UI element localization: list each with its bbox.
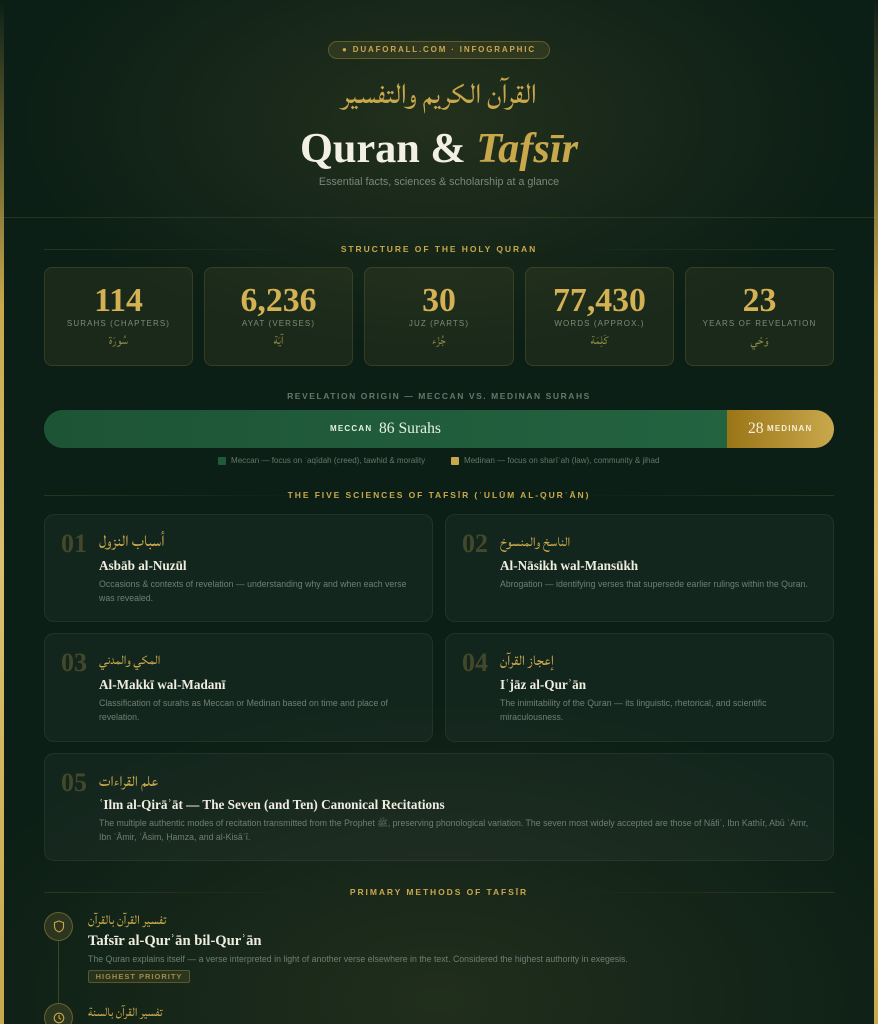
card 04: إعجاز القرآن <box>500 649 554 675</box>
medinan segment: MEDINAN <box>767 424 812 433</box>
card 01: أسباب النزول <box>99 528 165 557</box>
card 05: The multiple authentic modes of recitation transmitted from the Prophet ﷺ, preserving phonological variation. The seven most widely accepted are those of Nāfiʿ, Ibn Kathīr, Abū ʿAmr, <box>99 818 808 828</box>
stat: surahs: 114 <box>94 282 143 319</box>
stat: years: YEARS OF REVELATION <box>703 319 816 328</box>
stat: words: 77,430 <box>553 282 646 319</box>
method 1 text: The Quran explains itself — a verse interpreted in light of another verse elsewhere in the text. Considered the highest authority in exegesis. <box>88 954 628 964</box>
priority tag: HIGHEST PRIORITY <box>96 972 182 981</box>
stat: juz: جُزْء <box>432 330 446 352</box>
meccan segment: 86 Surahs <box>379 420 441 437</box>
icon: shield <box>44 912 73 941</box>
medinan segment: 28 <box>748 420 764 437</box>
badge <box>328 41 550 59</box>
card 05: ʿIlm al-Qirāʾāt — The Seven (and Ten) Canonical Recitations <box>99 797 445 812</box>
stat: ayat <box>204 267 353 366</box>
card 01: Occasions & contexts of revelation — understanding why and when each verse <box>99 578 406 588</box>
card 05 <box>44 753 834 861</box>
method 1 arabic: تفسير القرآن بالقرآن <box>88 909 166 933</box>
stat: juz <box>364 267 514 366</box>
header <box>0 0 878 218</box>
section heading: methods: PRIMARY METHODS OF TAFSĪR <box>350 887 528 897</box>
meccan segment <box>44 410 727 448</box>
card 03: Classification of surahs as Meccan or Medinan based on time and place of <box>99 698 388 708</box>
stat: ayat: AYAT (VERSES) <box>242 319 315 328</box>
stat: years: وَحْي <box>750 330 769 352</box>
card 01 <box>44 514 433 622</box>
card 03: المكي والمدني <box>99 650 160 673</box>
stat: years: 23 <box>743 282 776 319</box>
card 04: 04 <box>462 648 488 677</box>
card 05: 05 <box>61 768 87 797</box>
card 04: miraculousness. <box>500 712 563 722</box>
card 02: 02 <box>462 529 488 558</box>
priority tag <box>88 970 190 983</box>
stat: juz: JUZ (PARTS) <box>409 319 469 328</box>
card 01: Asbāb al-Nuzūl <box>99 558 187 573</box>
card 03: 03 <box>61 648 87 677</box>
revelation bar <box>44 410 834 448</box>
medinan segment <box>727 410 834 448</box>
section heading: structure: STRUCTURE OF THE HOLY QURAN <box>341 244 537 254</box>
legend: medinan: Medinan — focus on sharīʿah (law), community & jihad <box>464 456 659 465</box>
stat: surahs: سُورَة <box>109 330 128 352</box>
badge: ● DUAFORALL.COM · INFOGRAPHIC <box>342 45 536 54</box>
revelation heading: REVELATION ORIGIN — MECCAN VS. MEDINAN SURAHS <box>287 391 591 401</box>
card 02 <box>445 514 834 622</box>
timeline line <box>58 941 59 1003</box>
stat: words: كَلِمَة <box>591 330 608 352</box>
section heading: five sciences: THE FIVE SCIENCES OF TAFSĪR (ʿULŪM AL-QURʾĀN) <box>288 490 590 500</box>
card 05: Ibn ʿĀmir, ʿĀsim, Ḥamza, and al-Kisāʾī. <box>99 832 250 842</box>
card 04: The inimitability of the Quran — its linguistic, rhetorical, and scientific <box>500 698 766 708</box>
stat: surahs <box>44 267 193 366</box>
subtitle: Essential facts, sciences & scholarship at a glance <box>319 176 559 188</box>
stat: ayat: 6,236 <box>240 282 317 319</box>
card 03: revelation. <box>99 712 139 722</box>
icon: clock <box>44 1003 73 1024</box>
card 03: Al-Makkī wal-Madanī <box>99 677 225 692</box>
main title: Quran & Tafsīr <box>300 125 578 172</box>
stat: ayat: آيَة <box>274 330 283 352</box>
legend: meccan: Meccan — focus on ʿaqīdah (creed), tawhid & morality <box>231 456 425 465</box>
method 2 arabic: تفسير القرآن بالسنة <box>88 1001 162 1024</box>
card 02: Abrogation — identifying verses that supersede earlier rulings within the Quran. <box>500 578 808 588</box>
card 05: علم القراءات <box>99 768 158 796</box>
card 01: was revealed. <box>99 593 153 603</box>
stat: surahs: SURAHS (CHAPTERS) <box>67 319 170 328</box>
card 02: الناسخ والمنسوخ <box>500 530 570 555</box>
meccan segment: MECCAN <box>330 424 372 433</box>
arabic title: القرآن الكريم والتفسير <box>341 69 537 122</box>
card 02: Al-Nāsikh wal-Mansūkh <box>500 558 638 573</box>
card 03 <box>44 633 433 742</box>
method 1 <box>88 909 628 983</box>
stat: years <box>685 267 834 366</box>
stat: juz: 30 <box>422 282 456 319</box>
stat: words: WORDS (APPROX.) <box>554 319 645 328</box>
card 01: 01 <box>61 529 87 558</box>
card 04: Iʿjāz al-Qurʾān <box>500 677 586 692</box>
card 04 <box>445 633 834 742</box>
method 1 title: Tafsīr al-Qurʾān bil-Qurʾān <box>88 933 262 949</box>
stat: words <box>525 267 674 366</box>
